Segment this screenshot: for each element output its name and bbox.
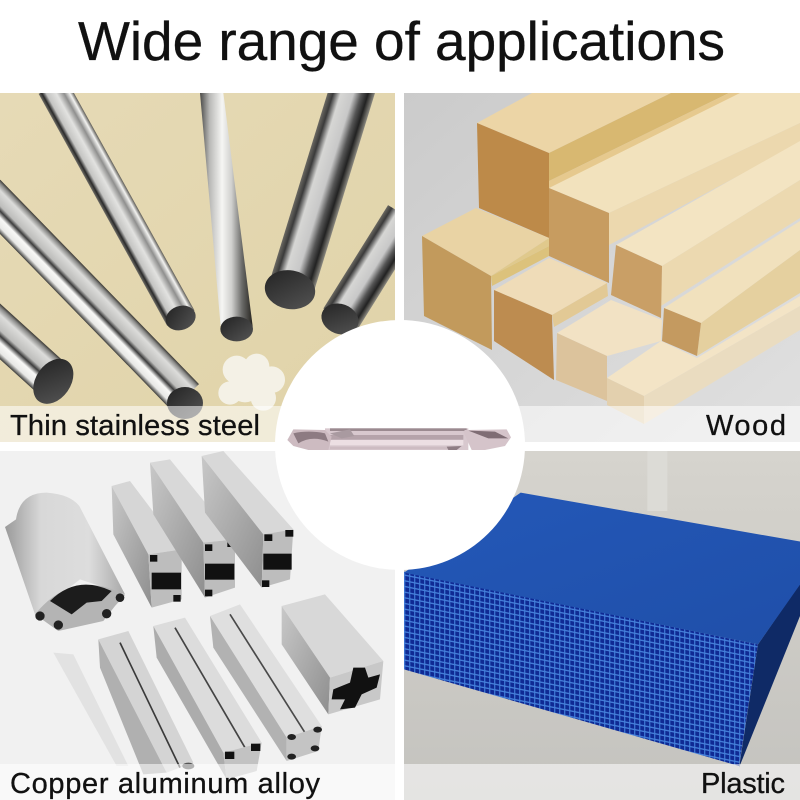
middle beam: [494, 258, 608, 380]
coral: [218, 354, 285, 411]
extrusion: back right: [202, 451, 293, 588]
bottom beam: [607, 296, 800, 424]
corrugated stack side: [404, 572, 758, 766]
tube 1: [39, 79, 199, 335]
dark stack edge: [739, 583, 800, 768]
label strip: plastic: [404, 764, 800, 800]
center circle: [275, 320, 525, 570]
label strip: copper aluminum alloy: Copper aluminum alloy: [10, 768, 320, 800]
panel: copper aluminum alloy: [0, 451, 395, 800]
extrusion: back middle: [150, 459, 235, 598]
beam 3: [611, 141, 800, 318]
tubes group: [0, 79, 422, 419]
extrusion: front right: [210, 604, 322, 761]
panel: plastic: [404, 451, 800, 800]
panel: wood: [404, 93, 800, 442]
tube 3: [262, 80, 375, 313]
beam 4: [662, 221, 800, 356]
extrusion: front middle: [153, 618, 262, 779]
label strip: wood: Wood: [706, 410, 786, 442]
half-round profile: [5, 493, 125, 631]
panel: thin stainless steel: [0, 93, 395, 442]
title: Wide range of applications: [78, 10, 725, 72]
lower beam: [556, 300, 662, 401]
extrusion: front left: [98, 631, 194, 774]
tube 4: [321, 205, 395, 334]
strip profile: [53, 653, 128, 766]
icon: double-ended drill bit: [287, 428, 511, 450]
extrusion: square: [282, 594, 383, 714]
label strip: thin stainless steel: Thin stainless steel: [10, 410, 260, 442]
label strip: thin stainless steel: [0, 406, 395, 442]
label strip: wood: [404, 406, 800, 442]
blue sheet top: [404, 493, 800, 644]
tube 5: [0, 180, 203, 419]
beam 1: [477, 93, 729, 238]
beam 2: [549, 93, 800, 283]
tube 2: [200, 93, 253, 341]
label strip: copper aluminum alloy: [0, 764, 395, 800]
left beam: [422, 208, 549, 350]
extrusion: back left: [112, 481, 182, 608]
label strip: plastic: Plastic: [701, 768, 785, 800]
tube 6: [0, 304, 74, 404]
